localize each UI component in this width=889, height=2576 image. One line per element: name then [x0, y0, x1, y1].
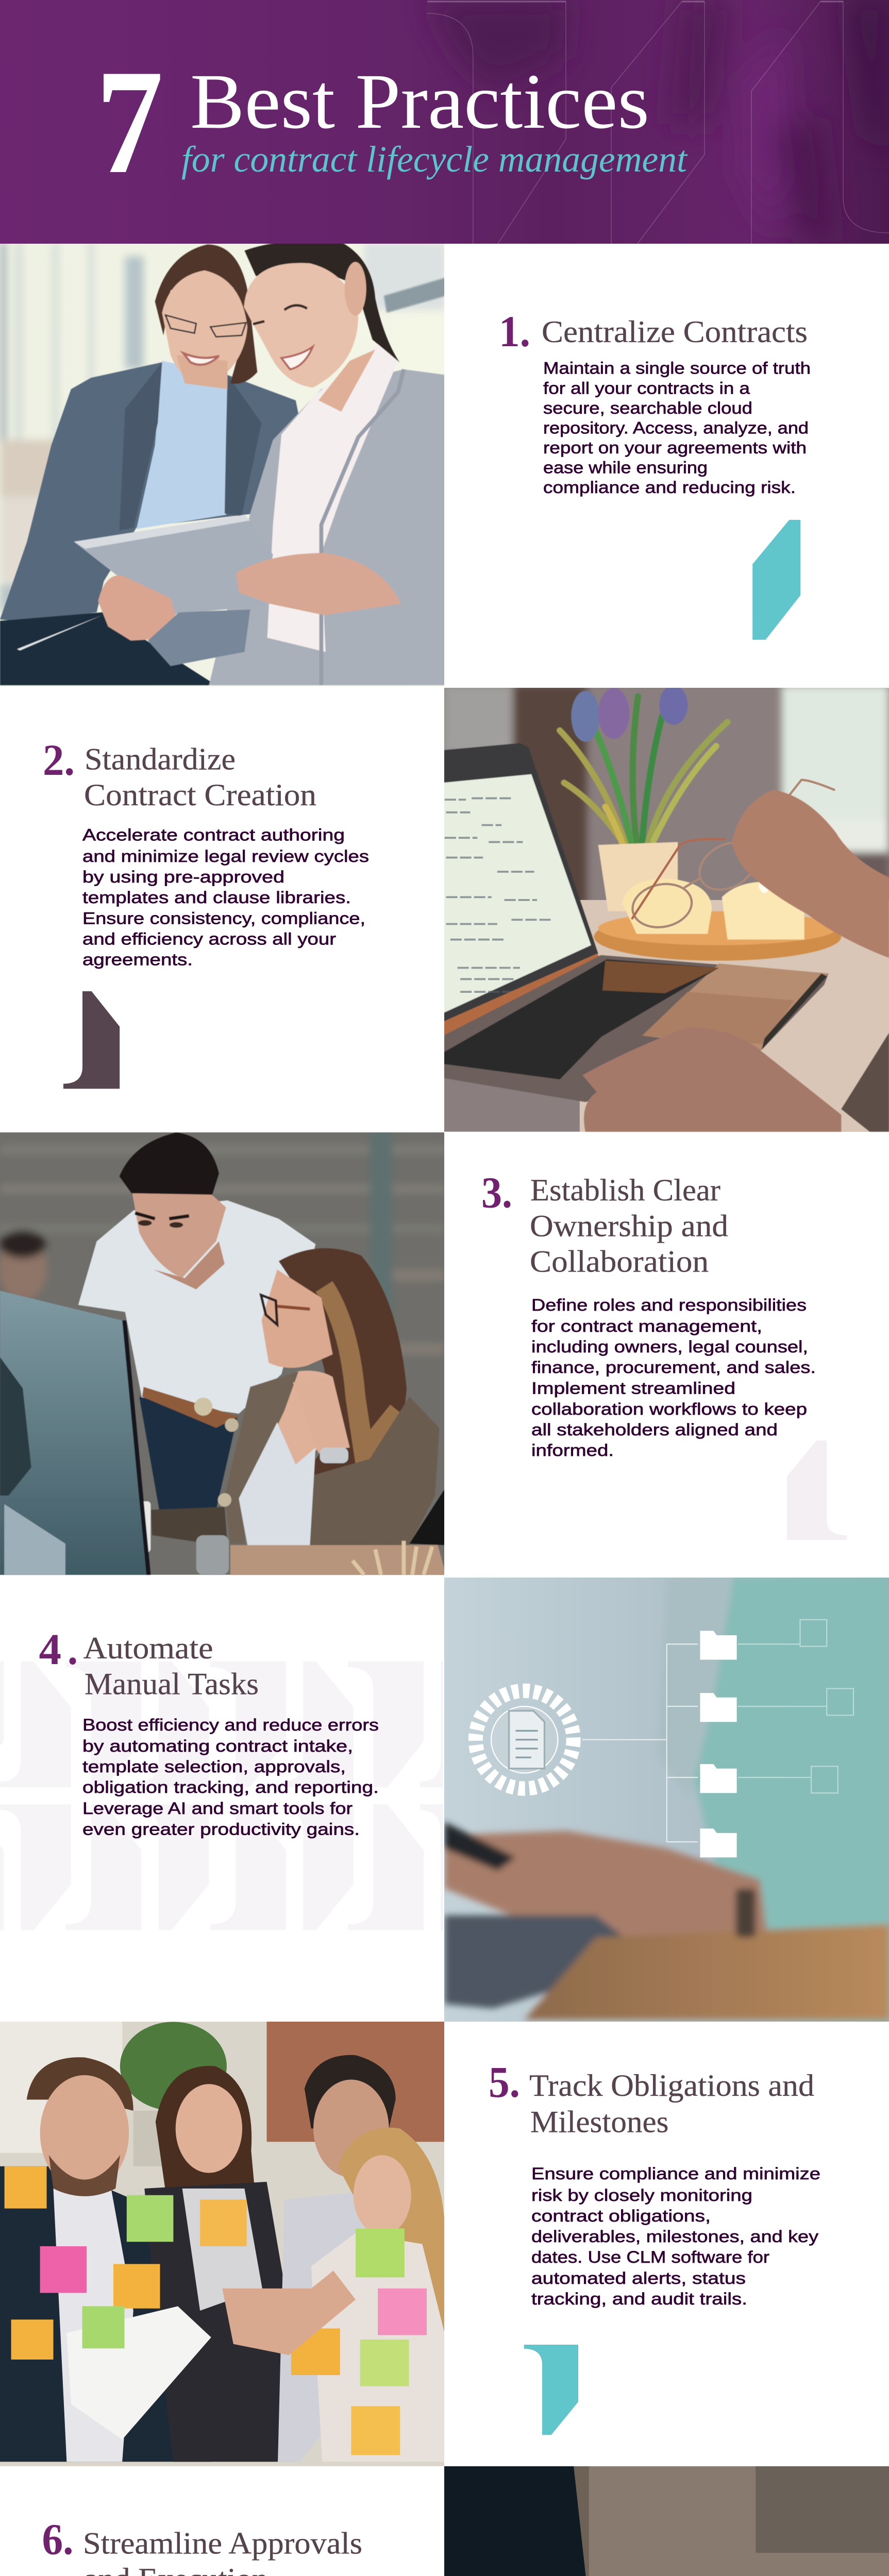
body 3: for contract management, — [531, 1317, 762, 1335]
heading 5: Track Obligations and — [529, 2069, 814, 2103]
heading 3: Ownership and — [530, 1209, 728, 1243]
body 3: collaboration workflows to keep — [531, 1400, 807, 1418]
watermark: repeating logo pattern — [0, 1662, 444, 1930]
body 1: ease while ensuring — [543, 459, 708, 477]
body 4: Leverage AI and smart tools for — [82, 1799, 353, 1818]
photo 1: two businesswomen with a tablet — [0, 241, 446, 686]
body 4 — [82, 1716, 379, 1839]
body 2: templates and clause libraries. — [82, 888, 351, 907]
body 5: tracking, and audit trails. — [531, 2290, 747, 2308]
body 2: Accelerate contract authoring — [82, 826, 345, 844]
panel: practice 1 text — [444, 244, 889, 688]
shape: teal logo fragment — [752, 520, 800, 640]
headline number 7: 7 — [96, 39, 163, 205]
body 1: for all your contracts in a — [543, 379, 750, 398]
number 4: . — [68, 1624, 78, 1674]
body 5 — [531, 2164, 820, 2308]
heading 4: Manual Tasks — [85, 1667, 259, 1701]
header watermark: outlined logo — [427, 2, 889, 244]
body 4: obligation tracking, and reporting. — [82, 1778, 379, 1797]
number 4: 4 — [39, 1624, 61, 1674]
body 2: Ensure consistency, compliance, — [82, 909, 365, 927]
number 4 — [39, 1624, 78, 1674]
body 4: even greater productivity gains. — [82, 1820, 360, 1839]
heading 3: Collaboration — [530, 1245, 709, 1279]
panel: practice 5 text — [444, 2022, 889, 2466]
number 2: 2. — [43, 735, 75, 785]
body 2: agreements. — [82, 951, 193, 969]
body 5: deliverables, milestones, and key — [531, 2227, 819, 2246]
shape: brown logo fragment — [63, 991, 120, 1089]
heading 2 — [84, 742, 316, 812]
panel: practice 4 text — [0, 1635, 443, 1930]
photo 4: document automation overlay on tablet user — [442, 1575, 889, 2022]
headline: Best Practices: Best Practices — [190, 58, 649, 145]
heading 5: Milestones — [530, 2105, 669, 2139]
body 2 — [82, 826, 369, 969]
body 1: Maintain a single source of truth — [543, 359, 811, 378]
heading 2: Standardize — [85, 742, 236, 776]
body 2: and minimize legal review cycles — [82, 847, 369, 866]
heading 6 — [83, 2527, 362, 2576]
icon: document in dashed ring — [476, 1644, 698, 1842]
body 5: automated alerts, status — [531, 2269, 746, 2287]
shape: pale logo fragment — [787, 1440, 847, 1540]
body 1: report on your agreements with — [543, 438, 807, 457]
photo 6: hand with pen over chart — [442, 2464, 889, 2576]
heading 4 — [83, 1631, 259, 1701]
heading 1: Centralize Contracts — [542, 315, 808, 349]
body 3: all stakeholders aligned and — [531, 1420, 778, 1439]
number 3: 3. — [481, 1168, 512, 1217]
number 5: 5. — [489, 2057, 520, 2107]
heading 5 — [529, 2069, 814, 2139]
body 1 — [543, 359, 811, 497]
number 6: 6. — [42, 2515, 73, 2564]
body 3: Implement streamlined — [531, 1379, 735, 1398]
subheadline: for contract lifecycle management — [181, 139, 688, 180]
heading 6: Streamline Approvals — [83, 2527, 362, 2561]
panel: practice 2 text — [0, 688, 444, 1132]
header banner — [0, 0, 889, 244]
body 4: by automating contract intake, — [82, 1737, 353, 1755]
photo 5: team with sticky notes — [0, 2020, 444, 2466]
heading 3 — [530, 1173, 728, 1279]
heading 2: Contract Creation — [84, 778, 316, 812]
body 3: informed. — [531, 1441, 614, 1460]
panel: practice 3 text — [444, 1132, 889, 1578]
body 4: template selection, approvals, — [82, 1757, 346, 1776]
body 5: dates. Use CLM software for — [531, 2248, 769, 2266]
photo 2: laptop, glasses and candles — [443, 685, 889, 1132]
body 3: finance, procurement, and sales. — [531, 1358, 816, 1377]
body 1: repository. Access, analyze, and — [543, 419, 809, 437]
body 5: Ensure compliance and minimize — [531, 2164, 820, 2183]
body 5: risk by closely monitoring — [531, 2186, 752, 2205]
body 1: secure, searchable cloud — [543, 399, 752, 417]
body 4: Boost efficiency and reduce errors — [82, 1716, 379, 1734]
body 5: contract obligations, — [531, 2207, 711, 2225]
heading 3: Establish Clear — [530, 1173, 720, 1207]
number 1: 1. — [499, 307, 530, 356]
body 3: including owners, legal counsel, — [531, 1337, 808, 1356]
body 3 — [531, 1296, 816, 1460]
photo 3: colleagues at a monitor — [0, 1128, 446, 1575]
body 3: Define roles and responsibilities — [531, 1296, 807, 1314]
body 1: compliance and reducing risk. — [543, 478, 796, 497]
panel: practice 6 text — [0, 2466, 444, 2576]
shape: teal logo fragment — [524, 2345, 578, 2435]
icons: folders — [700, 1631, 737, 1857]
heading 4: Automate — [83, 1631, 213, 1665]
body 2: by using pre-approved — [82, 868, 284, 886]
sticky notes — [5, 2166, 427, 2455]
body 2: and efficiency across all your — [82, 930, 336, 948]
